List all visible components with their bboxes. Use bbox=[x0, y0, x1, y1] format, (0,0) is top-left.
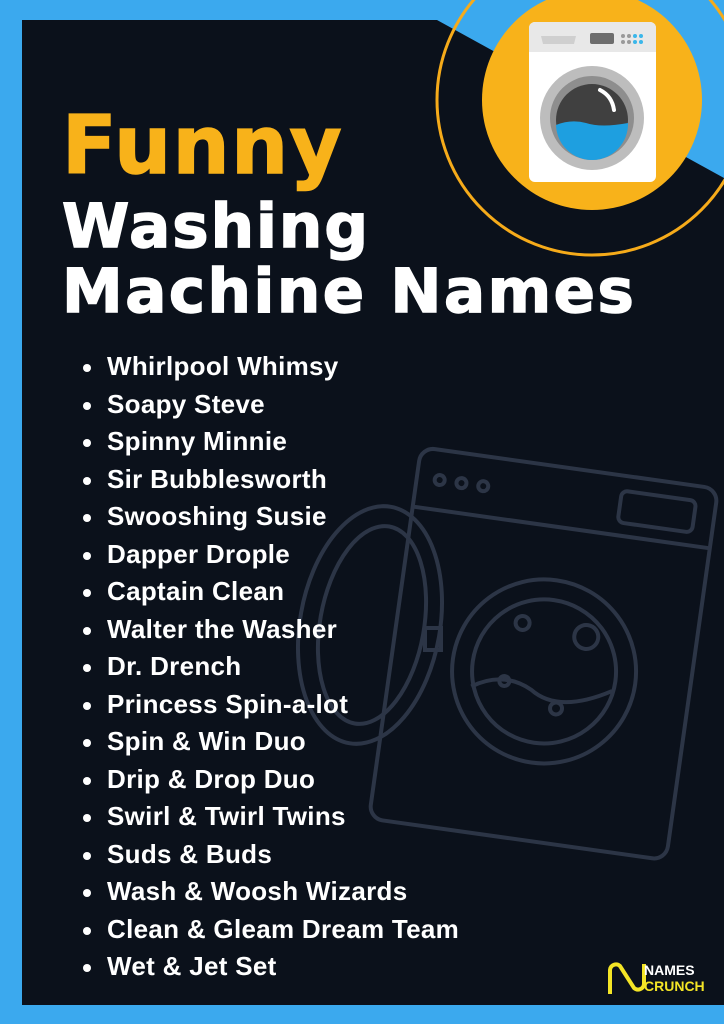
name list: Princess Spin-a-lot bbox=[107, 688, 348, 718]
name list: Walter the Washer bbox=[107, 614, 337, 644]
open door outline bbox=[280, 495, 460, 755]
logo bbox=[608, 962, 705, 994]
title: Washing bbox=[62, 191, 370, 262]
name list bbox=[83, 351, 459, 981]
yellow ring bbox=[437, 0, 724, 255]
name list: Whirlpool Whimsy bbox=[107, 351, 339, 381]
title: Machine Names bbox=[62, 256, 636, 327]
washer icon bbox=[482, 0, 702, 210]
name list: Soapy Steve bbox=[107, 388, 265, 418]
name list: Dapper Drople bbox=[107, 538, 290, 568]
name list: Drip & Drop Duo bbox=[107, 764, 315, 794]
name list: Swooshing Susie bbox=[107, 501, 327, 531]
name list: Sir Bubblesworth bbox=[107, 464, 327, 494]
logo: NAMES bbox=[644, 962, 695, 978]
name list: Swirl & Twirl Twins bbox=[107, 801, 346, 831]
name list: Captain Clean bbox=[107, 576, 284, 606]
name list: Clean & Gleam Dream Team bbox=[107, 914, 459, 944]
title: Funny bbox=[62, 99, 343, 192]
name list: Wet & Jet Set bbox=[107, 951, 277, 981]
title bbox=[62, 99, 636, 327]
name list: Dr. Drench bbox=[107, 651, 242, 681]
logo: CRUNCH bbox=[644, 978, 705, 994]
name list: Spinny Minnie bbox=[107, 426, 287, 456]
name list: Spin & Win Duo bbox=[107, 726, 306, 756]
name list: Wash & Woosh Wizards bbox=[107, 876, 407, 906]
name list: Suds & Buds bbox=[107, 838, 272, 868]
big outline washer bbox=[369, 447, 718, 860]
